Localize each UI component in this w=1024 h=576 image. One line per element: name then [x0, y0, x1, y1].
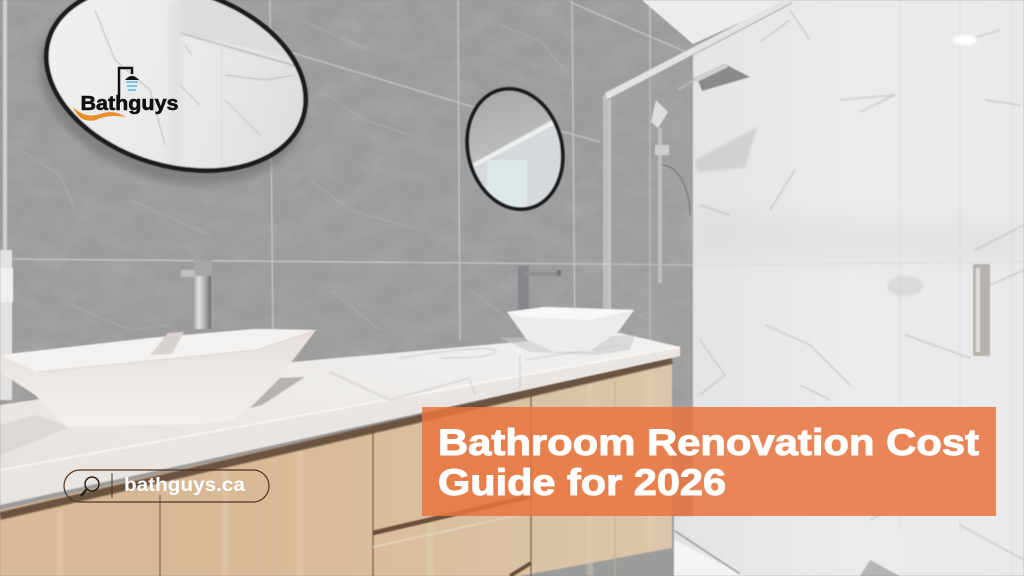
icon: shower [119, 68, 139, 100]
website text: bathguys.ca [124, 475, 245, 496]
small round mirror [464, 86, 566, 212]
title banner [422, 407, 996, 516]
shower head reflection [695, 127, 757, 172]
wood vanity cabinets [0, 358, 672, 576]
highlight on marble [953, 35, 977, 45]
rain shower head [678, 63, 750, 91]
wordmark: Bathguys [80, 93, 178, 115]
shower enclosure with white marble [642, 0, 1024, 576]
logo: Bathguys [73, 68, 178, 121]
wall fitting [887, 276, 923, 296]
floor and shower track [674, 531, 900, 576]
orange swoosh [73, 107, 126, 121]
right faucet [518, 266, 561, 310]
title text: Guide for 2026 [438, 462, 726, 503]
search pill: bathguys.ca [64, 470, 269, 502]
left faucet [181, 260, 212, 329]
door handle [973, 264, 990, 356]
title text: Bathroom Renovation Cost [438, 422, 979, 463]
large round mirror [37, 0, 309, 187]
glass shower panel with rail [603, 0, 792, 400]
icon: magnifier [81, 477, 99, 496]
hand shower and riser [651, 100, 690, 283]
marble countertop [0, 333, 680, 505]
right vessel sink [507, 307, 634, 352]
left vessel sink [0, 329, 316, 427]
left wall edge with switch [0, 0, 13, 400]
